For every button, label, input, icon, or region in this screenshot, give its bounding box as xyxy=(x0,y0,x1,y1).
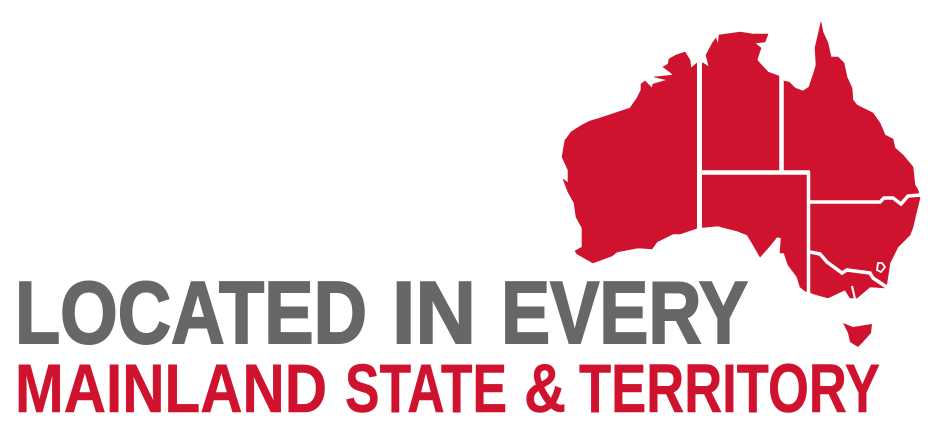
Tasmania xyxy=(843,323,872,347)
heading: located in every: EVERY xyxy=(501,263,748,362)
heading: located in every xyxy=(15,263,748,362)
subheading: mainland state and territory xyxy=(15,350,880,427)
subheading: mainland state and territory: & xyxy=(524,350,566,427)
Australian Capital Territory xyxy=(877,263,885,272)
map of Australia xyxy=(562,22,920,347)
subheading: mainland state and territory: STATE xyxy=(345,350,507,427)
heading: located in every: LOCATED xyxy=(15,263,367,362)
subheading: mainland state and territory: MAINLAND xyxy=(15,350,327,427)
state borders xyxy=(700,60,920,299)
heading: located in every: IN xyxy=(392,263,476,362)
mainland xyxy=(562,22,920,298)
